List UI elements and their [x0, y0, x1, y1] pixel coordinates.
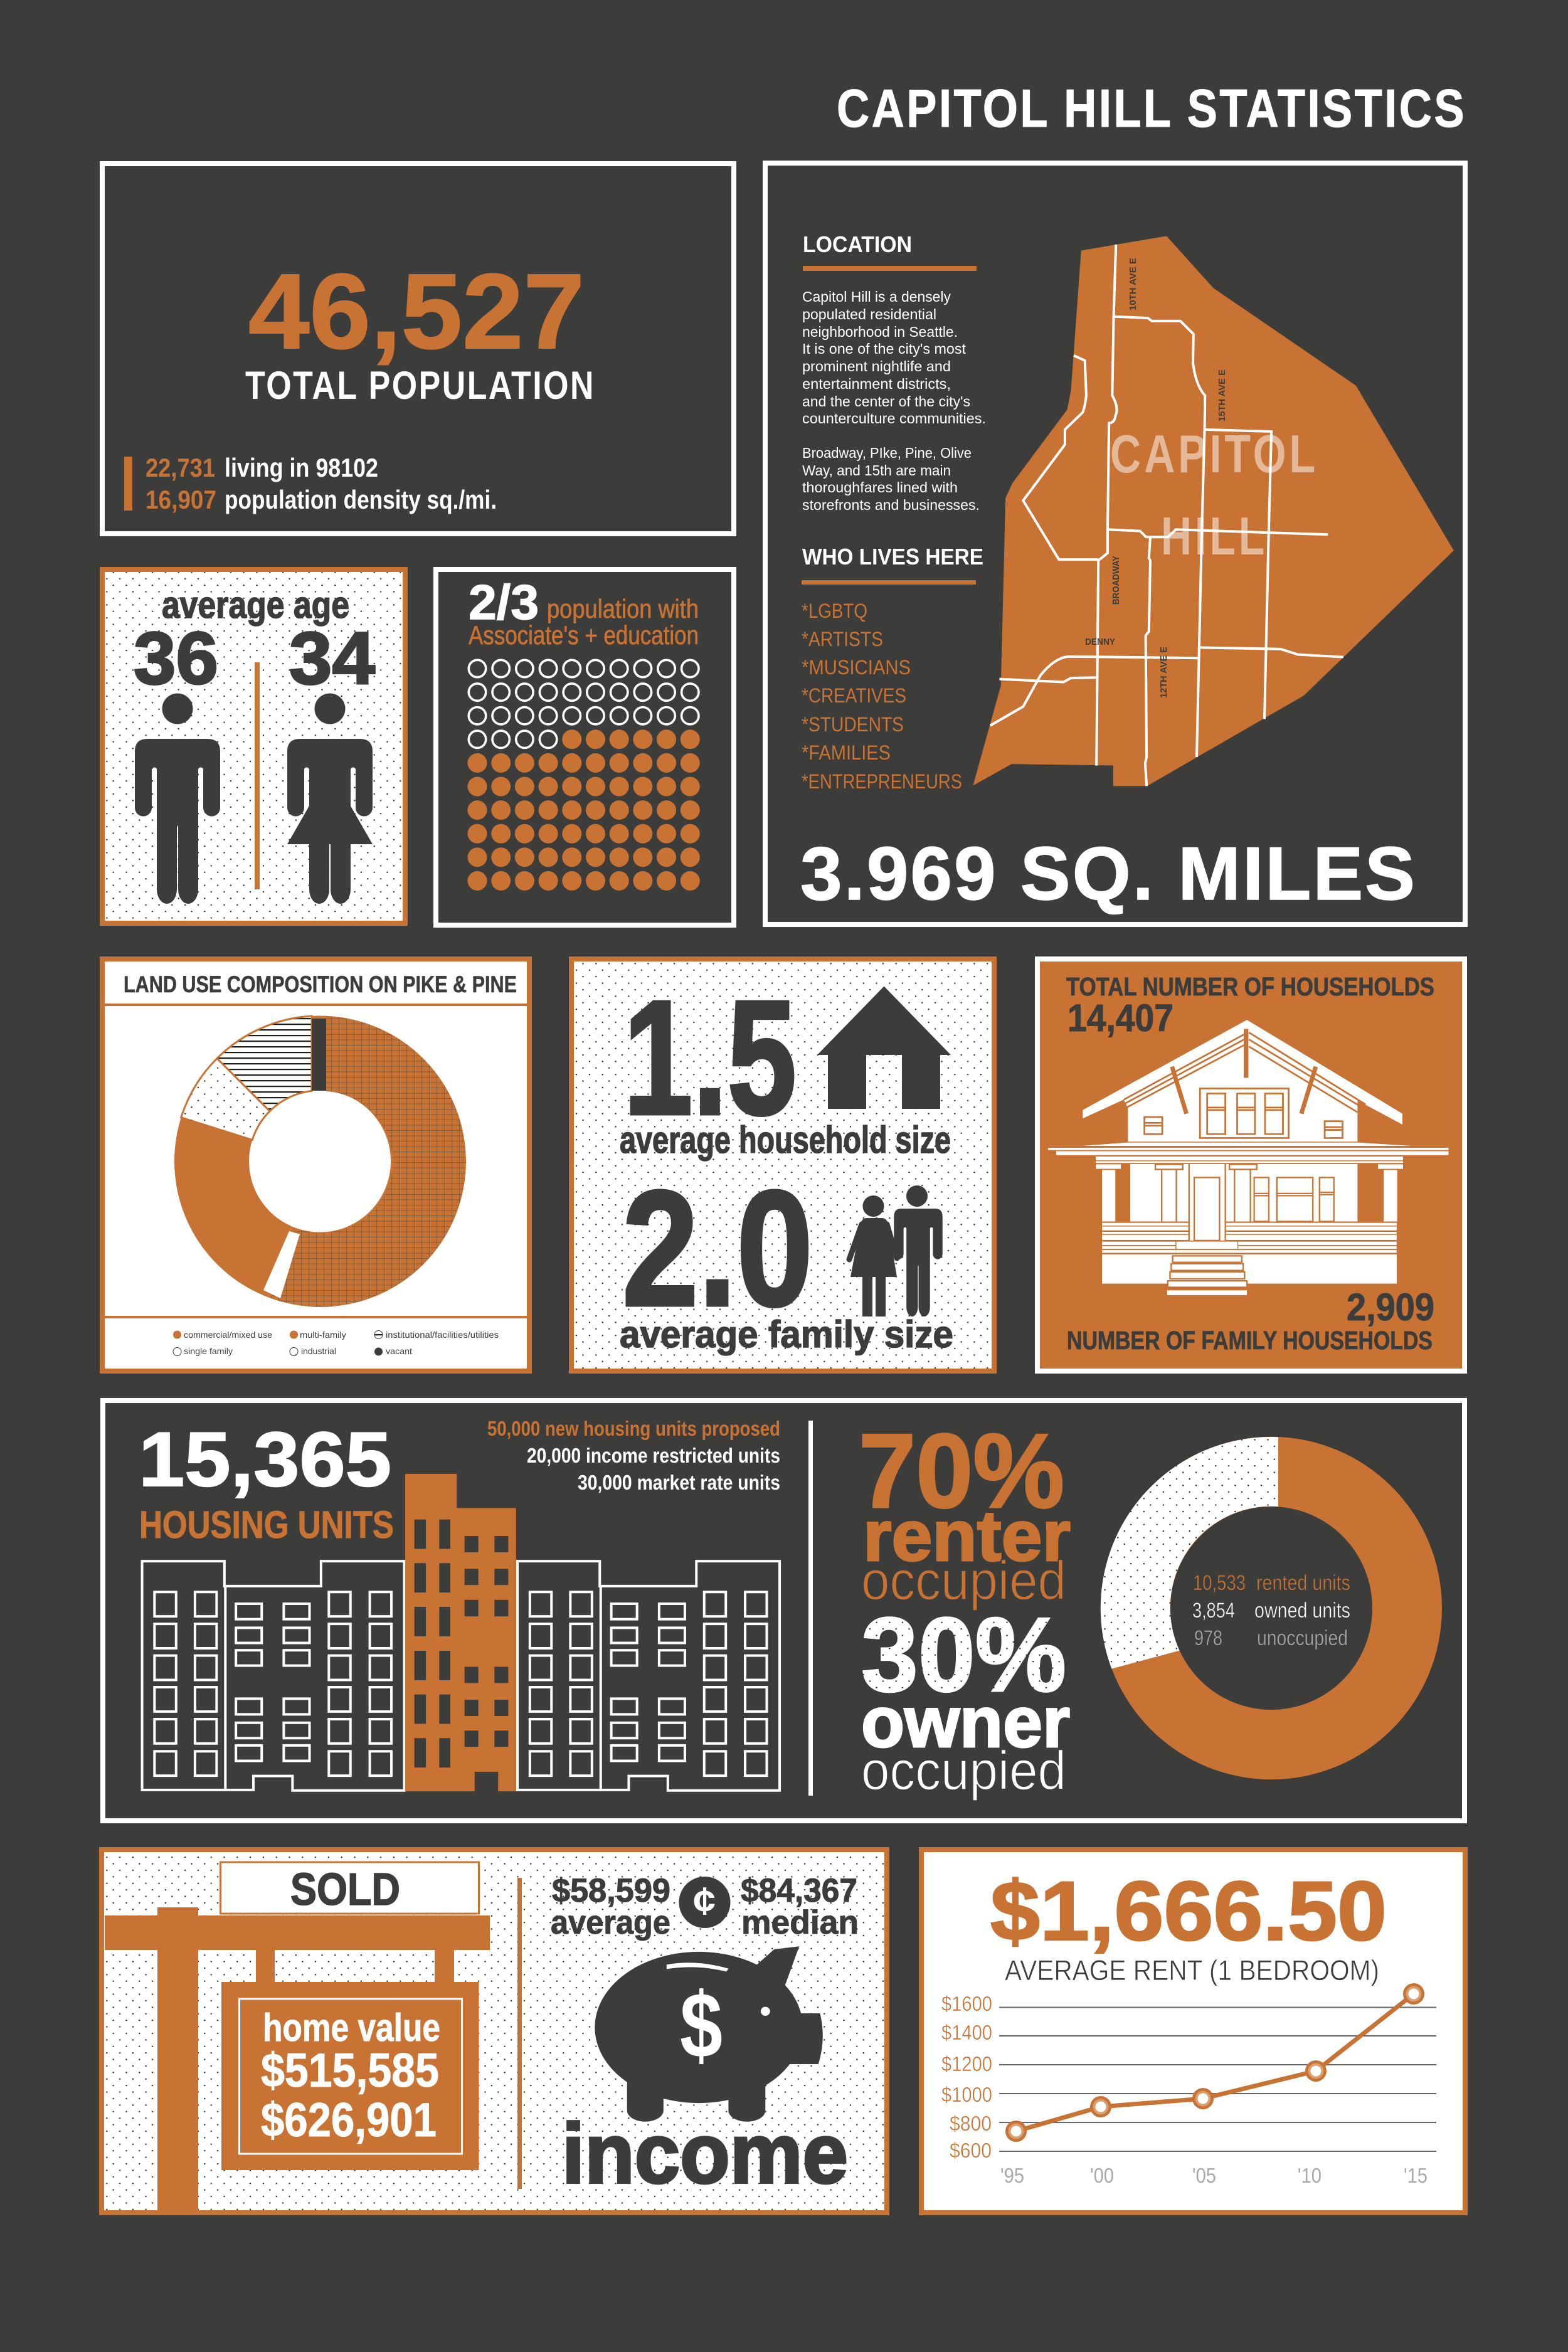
household size label: average household size [620, 1119, 951, 1161]
home value low: $515,585 [261, 2044, 439, 2097]
location description: It is one of the city's most [802, 341, 967, 357]
street labels: 15TH AVE E [1217, 369, 1227, 421]
population detail: 98102: 22,731 [146, 453, 215, 482]
rent figure: $1,666.50 [990, 1865, 1387, 1958]
legend divider [102, 1316, 529, 1318]
housing units number: 15,365 [139, 1417, 391, 1503]
y axis labels [941, 1992, 992, 2162]
x axis labels: '05 [1192, 2164, 1216, 2187]
home value label: home value [263, 2006, 440, 2050]
population detail: density: population density sq./mi. [225, 485, 497, 514]
icon: piggy bank [595, 1946, 823, 2122]
unoccupied units [1194, 1626, 1348, 1650]
unoccupied units: unoccupied [1257, 1626, 1348, 1650]
section divider [517, 1878, 522, 2189]
household size number: 1.5 [623, 967, 797, 1149]
who lives here list: *ARTISTS [802, 628, 883, 650]
panel: average rent [921, 1850, 1465, 2213]
owned units: 3,854 [1192, 1599, 1235, 1623]
panel: housing units [103, 1401, 1465, 1821]
title: CAPITOL HILL STATISTICS [837, 79, 1466, 139]
single family slit [263, 1231, 300, 1298]
data markers [1005, 1983, 1424, 2142]
area figure: 3.969 SQ. MILES [800, 832, 1417, 916]
owner occupied label: occupied [861, 1740, 1066, 1801]
population detail: density [146, 485, 497, 514]
who lives here rule [802, 580, 976, 585]
location description: counterculture communities. [802, 410, 986, 426]
icon: coin: ¢ [693, 1880, 716, 1923]
commercial segment [270, 1016, 466, 1307]
sold sign [105, 1862, 490, 2210]
owner label: owner [861, 1683, 1070, 1762]
who lives here list: *ENTREPRENEURS [802, 770, 962, 793]
unoccupied units: 978 [1194, 1626, 1222, 1650]
male age: 36 [134, 617, 218, 700]
who lives here list [802, 600, 962, 793]
rented units: 10,533 [1193, 1571, 1246, 1595]
x axis labels: '95 [1000, 2164, 1024, 2187]
legend: vacant [386, 1346, 412, 1356]
population detail: 98102: living in 98102 [225, 453, 378, 482]
line chart [941, 1983, 1436, 2187]
neighborhood map [973, 236, 1454, 786]
panel: home value and income [102, 1850, 887, 2213]
panel: location map [765, 163, 1465, 924]
households heading: TOTAL NUMBER OF HOUSEHOLDS [1066, 972, 1434, 1001]
owner percent: 30% [861, 1596, 1066, 1714]
who lives here list: *STUDENTS [802, 713, 904, 736]
median income: median [741, 1904, 859, 1941]
panel: land use [102, 959, 529, 1371]
owned units [1192, 1599, 1350, 1623]
location description: storefronts and businesses. [802, 497, 980, 513]
street labels [1085, 258, 1227, 698]
icon: house [817, 986, 951, 1109]
industrial segment [181, 1059, 270, 1140]
location description: entertainment districts, [802, 376, 951, 392]
map shape [973, 236, 1454, 786]
renter occupied label: occupied [861, 1550, 1066, 1611]
y axis labels: $1600 [941, 1992, 992, 2015]
location description: neighborhood in Seattle. [802, 324, 958, 340]
population detail: 98102 [146, 453, 378, 482]
y axis labels: $1000 [941, 2083, 992, 2106]
location description: populated residential [802, 306, 936, 322]
who lives here list: *MUSICIANS [802, 656, 911, 679]
icon: coin [679, 1877, 730, 1928]
map name: HILL [1161, 507, 1268, 566]
sign post [105, 1907, 490, 2210]
location description: and the center of the city's [802, 393, 970, 410]
rent line [1016, 1994, 1414, 2131]
x axis labels: '15 [1404, 2164, 1428, 2187]
median income [741, 1872, 859, 1941]
average income: $58,599 [552, 1872, 670, 1909]
icon: man [135, 694, 220, 904]
legend: multi-family [300, 1330, 346, 1340]
housing units label: HOUSING UNITS [139, 1503, 394, 1546]
location description: Way, and 15th are main [802, 462, 951, 479]
rent label: AVERAGE RENT (1 BEDROOM) [1005, 1954, 1379, 1986]
y axis labels: $800 [950, 2112, 992, 2135]
multi-family ring [174, 1016, 465, 1307]
panel: household and family size [571, 959, 994, 1371]
icon: piggy bank: $ [680, 1974, 723, 2077]
location description: thoroughfares lined with [802, 479, 958, 495]
legend: institutional/facilities/utilities [386, 1330, 499, 1340]
households number: 14,407 [1067, 997, 1173, 1039]
age heading: average age [162, 584, 349, 626]
x axis labels: '00 [1090, 2164, 1114, 2187]
map roads [990, 245, 1343, 786]
family size number: 2.0 [622, 1157, 813, 1340]
location rule [803, 266, 977, 271]
location description: Broadway, PIke, Pine, Olive [802, 445, 972, 461]
income restricted note: 20,000 income restricted units [527, 1444, 780, 1467]
illustration: apartment buildings [142, 1474, 780, 1791]
who lives here heading: WHO LIVES HERE [802, 544, 983, 569]
income label: income [562, 2106, 848, 2201]
legend: commercial/mixed use [184, 1330, 272, 1340]
vacant segment [312, 1019, 326, 1091]
age divider [255, 662, 260, 889]
legend [173, 1330, 499, 1356]
location description: Capitol Hill is a densely [802, 289, 951, 305]
icon: woman [287, 694, 373, 904]
population number: 46,527 [248, 252, 585, 371]
home value high: $626,901 [261, 2094, 437, 2147]
street labels: DENNY [1085, 637, 1115, 647]
y axis labels: $1200 [941, 2052, 992, 2075]
x axis labels [1000, 2164, 1428, 2187]
institutional segment [217, 1016, 312, 1111]
donut chart [174, 1016, 466, 1307]
education label line 2: Associate's + education [469, 620, 699, 650]
location description: prominent nightlife and [802, 358, 951, 374]
rented units: rented units [1256, 1571, 1350, 1595]
who lives here list: *LGBTQ [802, 600, 867, 622]
donut chart: occupancy [1101, 1437, 1442, 1779]
renter label: renter [863, 1496, 1071, 1576]
inner border [240, 1999, 462, 2154]
map name [1110, 425, 1318, 566]
average income [551, 1872, 670, 1941]
legend: single family [184, 1346, 233, 1356]
heading divider [102, 1004, 529, 1006]
average income: average [551, 1904, 670, 1941]
legend: industrial [301, 1346, 336, 1356]
y axis labels: $600 [950, 2139, 992, 2162]
panel: average age [102, 569, 405, 923]
location heading: LOCATION [803, 231, 912, 257]
rented units [1193, 1571, 1350, 1595]
panel: education [436, 569, 734, 925]
location description [802, 289, 986, 513]
proposed units note: 50,000 new housing units proposed [487, 1417, 780, 1440]
grid lines [999, 2007, 1436, 2151]
y axis labels: $1400 [941, 2021, 992, 2044]
renter percent: 70% [859, 1412, 1064, 1530]
panel: total households [1037, 959, 1465, 1371]
population detail: density: 16,907 [146, 485, 216, 514]
x axis labels: '10 [1298, 2164, 1322, 2187]
median income: $84,367 [741, 1872, 857, 1909]
who lives here list: *FAMILIES [802, 741, 891, 764]
sold text: SOLD [290, 1865, 400, 1915]
family size label: average family size [620, 1313, 953, 1355]
land use heading: LAND USE COMPOSITION ON PIKE & PINE [124, 972, 517, 997]
owned units: owned units [1254, 1599, 1350, 1623]
street labels: BROADWAY [1111, 556, 1121, 605]
map name: CAPITOL [1110, 425, 1318, 484]
market rate note: 30,000 market rate units [578, 1471, 780, 1494]
education label line 1: population with [547, 594, 699, 623]
accent bar [124, 457, 132, 511]
who lives here list: *CREATIVES [802, 684, 906, 707]
street labels: 12TH AVE E [1158, 647, 1169, 698]
panel: total population [102, 164, 734, 534]
family households label: NUMBER OF FAMILY HOUSEHOLDS [1067, 1326, 1433, 1355]
sold rider [221, 1862, 479, 1914]
population label: TOTAL POPULATION [245, 364, 595, 408]
icon: couple [849, 1185, 943, 1316]
dot matrix: 66 of 100 [468, 660, 700, 891]
section divider [808, 1421, 813, 1796]
education fraction: 2/3 [469, 575, 539, 630]
illustration: craftsman house [1048, 1020, 1449, 1295]
female age: 34 [289, 617, 375, 700]
family households number: 2,909 [1347, 1286, 1434, 1328]
street labels: 10TH AVE E [1128, 258, 1138, 310]
